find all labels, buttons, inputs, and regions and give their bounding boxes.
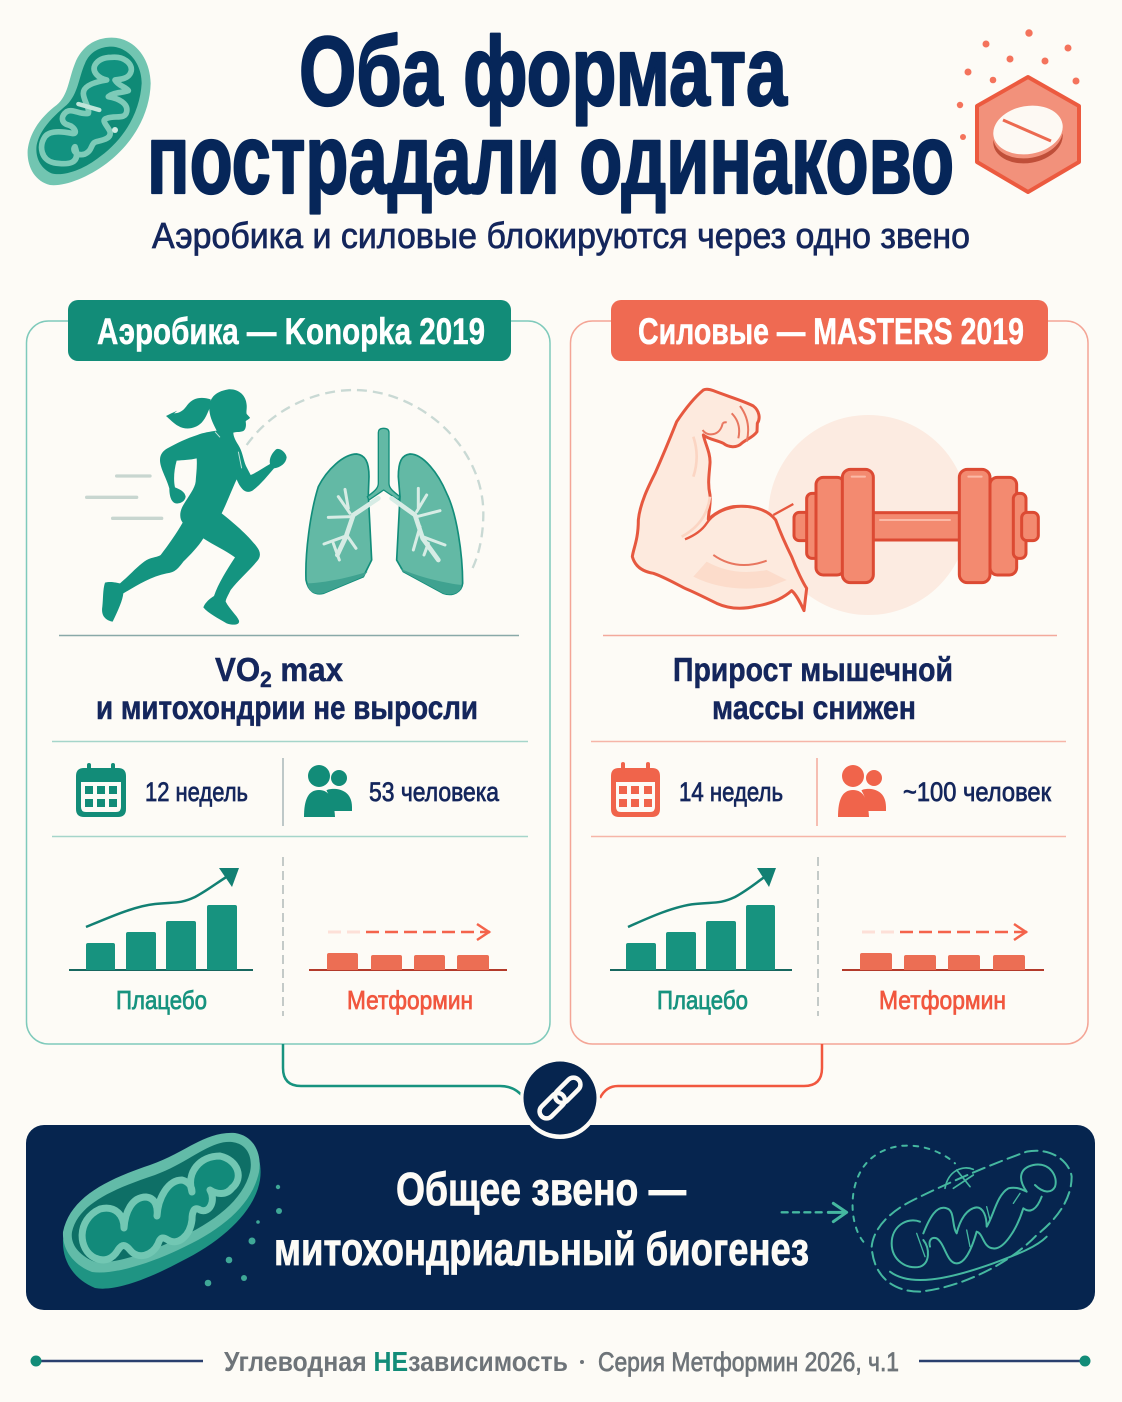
heading: VO2 max: и митохондрии не выросли xyxy=(96,689,478,726)
icon: mitochondrion top left xyxy=(28,38,151,185)
footer line left xyxy=(30,1356,203,1366)
banner text xyxy=(274,1163,809,1275)
footer series: Серия Метформин 2026, ч.1 xyxy=(598,1347,899,1377)
panel frame xyxy=(26,321,550,1044)
label: metformin: Метформин xyxy=(879,985,1006,1015)
stat: participants: ~100 человек xyxy=(903,777,1051,807)
panel frame xyxy=(570,321,1088,1044)
stat: participants: 53 человека xyxy=(369,777,500,807)
label: metformin: Метформин xyxy=(347,985,473,1015)
label: placebo: Плацебо xyxy=(116,985,207,1015)
divider under illustration xyxy=(59,634,519,636)
stat: duration: 14 недель xyxy=(679,777,783,807)
banner background xyxy=(26,1125,1095,1310)
heading: VO2 max: 2 xyxy=(260,667,272,692)
panel header badge xyxy=(68,300,511,361)
icon: people xyxy=(304,765,352,817)
footer xyxy=(30,1346,1090,1377)
heading: VO2 max xyxy=(96,651,478,726)
icon: lungs with dashed arc xyxy=(247,390,483,594)
icon: people xyxy=(838,765,886,817)
title xyxy=(147,16,954,214)
banner text: Общее звено — xyxy=(396,1163,686,1215)
heading: muscle mass xyxy=(673,651,953,726)
particle dots xyxy=(205,1185,282,1286)
subtitle: Аэробика и силовые блокируются через одно звено xyxy=(152,215,970,256)
panel header badge: Аэробика — Konopka 2019 xyxy=(97,311,485,352)
heading: muscle mass: массы снижен xyxy=(712,689,916,726)
panel header badge xyxy=(611,300,1048,361)
connector: aerobics to link xyxy=(283,1044,524,1098)
icon: dashed arrow and failed mitochondrion xyxy=(782,1146,1072,1292)
heading: VO2 max: max xyxy=(272,651,344,688)
stat: duration: 12 недель xyxy=(145,777,248,807)
chart: metformin bars xyxy=(842,924,1044,970)
connector: strength to link xyxy=(600,1044,822,1098)
heading: muscle mass: Прирост мышечной xyxy=(673,651,953,688)
icon: runner xyxy=(87,389,287,625)
icon: flexed arm and dumbbell xyxy=(632,389,1038,615)
icon: calendar xyxy=(76,763,126,817)
title line 1: Оба формата xyxy=(299,16,788,126)
chart: placebo bars xyxy=(610,868,792,970)
divider under illustration xyxy=(603,634,1057,636)
chart: placebo bars xyxy=(69,868,253,970)
footer line right xyxy=(919,1356,1090,1366)
icon: link circle xyxy=(520,1059,600,1139)
icon: calendar xyxy=(611,762,660,817)
footer brand: Углеводная НЕзависимость xyxy=(224,1346,568,1377)
panel: strength xyxy=(570,300,1088,1044)
banner text: митохондриальный биогенез xyxy=(274,1223,809,1275)
label: placebo: Плацебо xyxy=(657,985,748,1015)
icon: pill in hexagon with dots xyxy=(957,29,1080,192)
heading: VO2 max: VO xyxy=(215,651,263,688)
icon: mitochondrion banner left xyxy=(63,1133,261,1289)
panel: shared link banner xyxy=(26,1059,1095,1310)
chart: metformin bars xyxy=(309,924,507,970)
footer separator dot xyxy=(580,1360,584,1364)
panel: aerobics xyxy=(26,300,550,1044)
